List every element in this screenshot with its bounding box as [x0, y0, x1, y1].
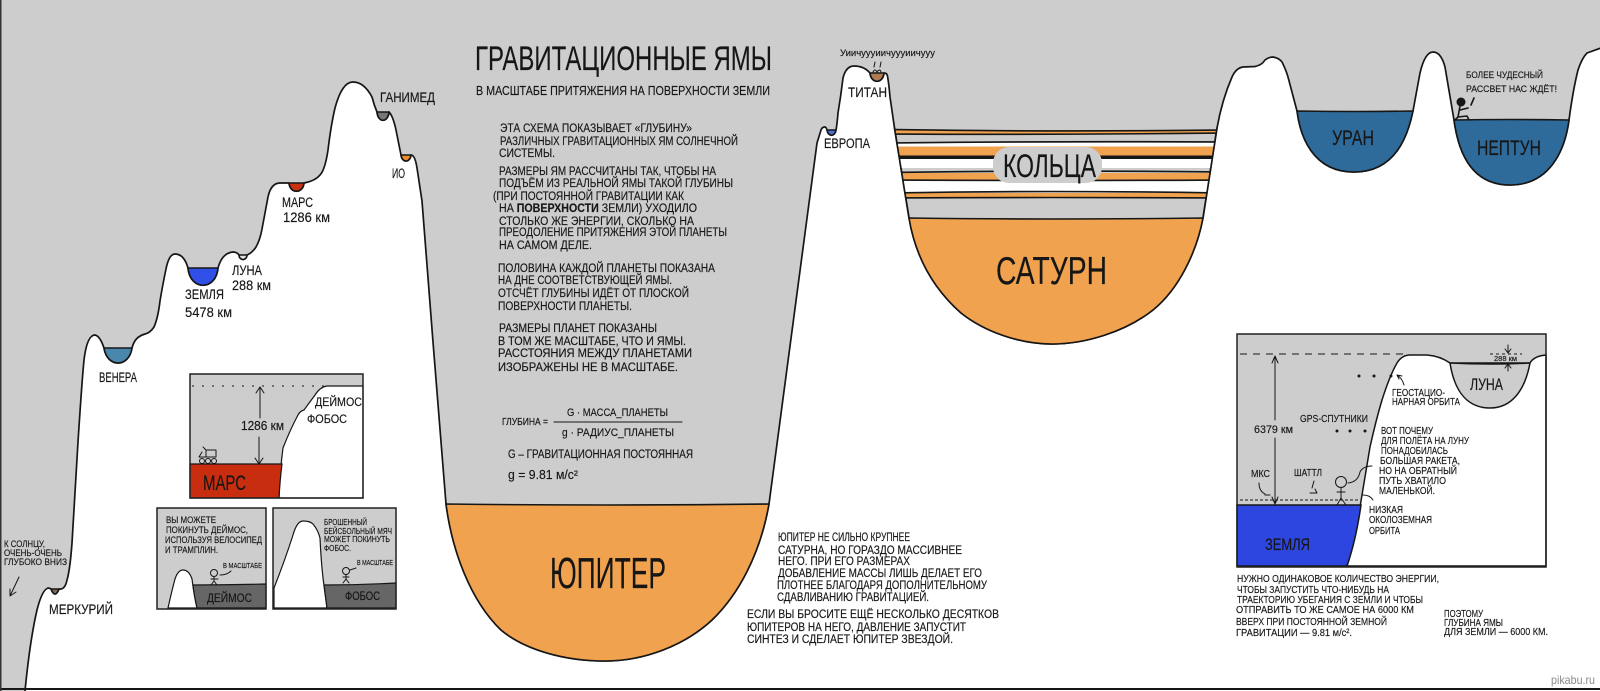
Earth depth note: ГЛУБИНА ЯМЫ — [1444, 618, 1503, 629]
label: Earth depth: ЗЕМЛЯ — [185, 287, 224, 302]
icon: Titan sled person — [873, 62, 881, 72]
planet: Neptune — [1454, 120, 1569, 185]
note: big rocket: ДЛЯ ПОЛЁТА НА ЛУНУ — [1381, 435, 1469, 447]
Earth energy note: ОТПРАВИТЬ ТО ЖЕ САМОЕ НА 6000 КМ — [1236, 604, 1414, 616]
icon: stick figure — [210, 570, 231, 585]
explanation text block: СТОЛЬКО ЖЕ ЭНЕРГИИ, СКОЛЬКО НА — [499, 216, 694, 228]
explanation text block: (ПРИ ПОСТОЯННОЙ ГРАВИТАЦИИ КАК — [493, 190, 684, 203]
label pill: Rings — [993, 147, 1102, 184]
label: low Earth orbit: НИЗКАЯ — [1369, 505, 1403, 516]
inset panel: Deimos — [157, 508, 266, 609]
label: geostationary orbit: ГЕОСТАЦИО- — [1392, 388, 1445, 399]
planet: Uranus — [1297, 111, 1413, 172]
geostationary satellites — [1358, 374, 1392, 378]
Jupiter note: ДОБАВЛЕНИЕ МАССЫ ЛИШЬ ДЕЛАЕТ ЕГО — [778, 568, 982, 580]
Neptune speech — [1466, 69, 1557, 95]
intro text block: ЭТА СХЕМА ПОКАЗЫВАЕТ «ГЛУБИНУ» — [500, 123, 692, 135]
label: Earth: ЗЕМЛЯ — [1265, 535, 1310, 554]
label: GPS: GPS-СПУТНИКИ — [1300, 413, 1368, 425]
label: Moon depth: 288 км — [232, 278, 271, 293]
label: Mars: МАРС — [203, 472, 246, 495]
arrow and shuttle icon — [1310, 481, 1317, 493]
note: to the Sun: ГЛУБОКО ВНИЗ — [4, 557, 67, 568]
Jupiter note — [777, 532, 988, 604]
depth formula: ГЛУБИНА = — [502, 417, 548, 428]
planet: Europa — [827, 130, 836, 135]
planet: Titan — [870, 73, 884, 81]
planet: Venus — [104, 348, 132, 363]
Earth depth note: ПОЭТОМУ — [1444, 609, 1483, 620]
Jupiter star note — [747, 609, 999, 646]
subtitle: В МАСШТАБЕ ПРИТЯЖЕНИЯ НА ПОВЕРХНОСТИ ЗЕМЛИ — [476, 84, 770, 98]
Moon well — [1450, 363, 1530, 408]
explanation text block: РАЗМЕРЫ ЯМ РАССЧИТАНЫ ТАК, ЧТОБЫ НА — [499, 166, 716, 178]
planet: Ganymede — [377, 112, 389, 120]
label: Phobos: ФОБОС — [307, 412, 347, 426]
arrow and ISS icon — [1259, 483, 1270, 495]
label: ISS: МКС — [1251, 469, 1270, 480]
scale text block: РАЗМЕРЫ ПЛАНЕТ ПОКАЗАНЫ — [499, 323, 657, 335]
label: Mercury: МЕРКУРИЙ — [49, 602, 113, 617]
label: Mars depth: 1286 км — [283, 210, 330, 225]
label: Titan: ТИТАН — [848, 85, 887, 100]
planet: Earth — [188, 268, 218, 285]
label: low Earth orbit — [1369, 505, 1432, 537]
Deimos text: ПОКИНУТЬ ДЕЙМОС, — [166, 524, 248, 536]
note: big rocket: ПУТЬ ХВАТИЛО — [1379, 475, 1446, 487]
note: to the Sun — [4, 539, 67, 568]
note: big rocket: ВОТ ПОЧЕМУ — [1381, 425, 1433, 437]
planet halves text block: ПОЛОВИНА КАЖДОЙ ПЛАНЕТЫ ПОКАЗАНА — [498, 262, 715, 275]
Deimos text: И ТРАМПЛИН. — [165, 545, 218, 556]
note: big rocket: ПОНАДОБИЛАСЬ — [1381, 445, 1448, 457]
GPS satellites — [1336, 430, 1366, 432]
note: big rocket: НО НА ОБРАТНЫЙ — [1379, 464, 1457, 477]
label: low Earth orbit: ОКОЛОЗЕМНАЯ — [1369, 515, 1432, 526]
Jupiter star note: ЕСЛИ ВЫ БРОСИТЕ ЕЩЁ НЕСКОЛЬКО ДЕСЯТКОВ — [747, 609, 999, 621]
Earth energy note — [1236, 573, 1439, 639]
to scale note: В МАСШТАБЕ — [223, 563, 262, 570]
label: Europa: ЕВРОПА — [824, 136, 870, 151]
icon: stick figure — [342, 568, 356, 583]
Deimos text — [165, 515, 262, 556]
label: Saturn: САТУРН — [996, 250, 1107, 293]
Saturn rings — [890, 128, 1220, 218]
planet: Saturn — [909, 218, 1203, 344]
label: Earth depth — [185, 287, 232, 320]
icon: rover — [199, 447, 216, 464]
inset panel: Phobos — [273, 508, 396, 609]
arrow: down to the Sun — [10, 577, 19, 596]
label: geostationary orbit — [1392, 388, 1460, 408]
planet: Mars — [289, 183, 304, 191]
arrow: geostationary — [1397, 375, 1404, 385]
Earth energy note: ЧТОБЫ ЗАПУСТИТЬ ЧТО-НИБУДЬ НА — [1237, 584, 1389, 596]
planet: Io — [401, 155, 411, 161]
note: big rocket — [1379, 425, 1469, 497]
planet: Jupiter — [446, 504, 769, 661]
label: Io: ИО — [392, 166, 405, 181]
to scale note: В МАСШТАБЕ — [357, 560, 393, 567]
Earth energy note: ГРАВИТАЦИИ — 9.81 м/с². — [1236, 627, 1352, 639]
intro text block — [499, 123, 738, 160]
inset panel: Mars: 1286 км — [241, 419, 284, 433]
label: shuttle: ШАТТЛ — [1294, 468, 1322, 479]
Deimos text: ИСПОЛЬЗУЯ ВЕЛОСИПЕД — [165, 535, 262, 546]
note: big rocket: БОЛЬШАЯ РАКЕТА, — [1380, 455, 1460, 467]
Phobos text: БРОШЕННЫЙ — [324, 516, 367, 527]
Jupiter note: ПЛОТНЕЕ БЛАГОДАРЯ ДОПОЛНИТЕЛЬНОМУ — [777, 580, 988, 592]
depth formula: G – ГРАВИТАЦИОННАЯ ПОСТОЯННАЯ — [508, 449, 693, 461]
depth formula: G · МАССА_ПЛАНЕТЫ — [567, 407, 668, 419]
Earth energy note: ВВЕРХ ПРИ ПОСТОЯННОЙ ЗЕМНОЙ — [1236, 615, 1387, 628]
label: Moon depth: ЛУНА — [232, 263, 262, 278]
depth formula — [502, 407, 693, 482]
planet halves text block — [498, 262, 715, 313]
explanation text block: НА САМОМ ДЕЛЕ. — [499, 240, 592, 252]
note: big rocket: МАЛЕНЬКОЙ. — [1379, 484, 1435, 497]
Jupiter note: САТУРНА, НО ГОРАЗДО МАССИВНЕЕ — [778, 545, 962, 557]
Earth depth note: ДЛЯ ЗЕМЛИ — 6000 КМ. — [1444, 627, 1548, 638]
Jupiter note: ЮПИТЕР НЕ СИЛЬНО КРУПНЕЕ — [778, 532, 910, 544]
explanation text block: ПРЕОДОЛЕНИЕ ПРИТЯЖЕНИЯ ЭТОЙ ПЛАНЕТЫ — [499, 226, 727, 239]
watermark: pikabu.ru — [1551, 673, 1595, 687]
Jupiter star note: ЮПИТЕРОВ НА НЕГО, ДАВЛЕНИЕ ЗАПУСТИТ — [747, 622, 966, 634]
planet halves text block: ОТСЧЁТ ГЛУБИНЫ ИДЁТ ОТ ПЛОСКОЙ — [498, 287, 689, 300]
inset panel: Earth escape — [1237, 334, 1546, 567]
arrow: 6379 km — [1272, 356, 1278, 504]
arrow: 1286 km — [255, 387, 264, 464]
moon depth marker: 288 км — [1494, 356, 1517, 363]
Earth energy note: НУЖНО ОДИНАКОВОЕ КОЛИЧЕСТВО ЭНЕРГИИ, — [1237, 573, 1439, 585]
stick figure with speech line — [1336, 466, 1372, 505]
label: Deimos ground: ДЕЙМОС — [207, 592, 252, 605]
label: Deimos: ДЕЙМОС — [315, 394, 362, 409]
Earth block — [1237, 505, 1361, 566]
label: Phobos ground: ФОБОС — [345, 591, 380, 603]
depth formula: g = 9.81 м/с² — [508, 467, 579, 482]
label: Mars depth — [282, 195, 330, 225]
label: geostationary orbit: НАРНАЯ ОРБИТА — [1392, 397, 1460, 408]
note: to the Sun: ОЧЕНЬ-ОЧЕНЬ — [4, 548, 62, 559]
intro text block: СИСТЕМЫ. — [499, 148, 555, 160]
planet halves text block: НА ДНЕ СООТВЕТСТВУЮЩЕЙ ЯМЫ. — [498, 274, 672, 287]
Earth depth note — [1444, 609, 1548, 638]
arrow: LEO — [1363, 495, 1373, 500]
label: Venus: ВЕНЕРА — [99, 370, 137, 385]
planet halves text block: ПОВЕРХНОСТИ ПЛАНЕТЫ. — [498, 301, 632, 313]
label: Earth depth: 5478 км — [185, 305, 232, 320]
label: Moon depth — [232, 263, 271, 293]
label: Uranus: УРАН — [1332, 127, 1374, 150]
depth formula: g · РАДИУС_ПЛАНЕТЫ — [562, 427, 674, 439]
intro text block: РАЗЛИЧНЫХ ГРАВИТАЦИОННЫХ ЯМ СОЛНЕЧНОЙ — [500, 135, 738, 148]
label pill: Rings: КОЛЬЦА — [1003, 148, 1096, 184]
Deimos text: ВЫ МОЖЕТЕ — [166, 515, 216, 526]
Earth energy note: ТРАЕКТОРИЮ УБЕГАНИЯ С ЗЕМЛИ И ЧТОБЫ — [1237, 594, 1423, 606]
scale text block — [498, 323, 692, 374]
icon: sitting figure on Neptune — [1455, 98, 1474, 120]
inset panel: Earth escape: 6379 км — [1254, 424, 1293, 436]
Neptune speech: РАССВЕТ НАС ЖДЁТ! — [1466, 84, 1557, 95]
Phobos text — [324, 516, 392, 553]
label: Jupiter: ЮПИТЕР — [550, 549, 666, 598]
planet: Mercury — [51, 589, 59, 594]
Neptune speech: БОЛЕЕ ЧУДЕСНЫЙ — [1466, 69, 1543, 81]
label: low Earth orbit: ОРБИТА — [1369, 526, 1400, 537]
Titan whee caption: Уиичуууиичуууиичууу — [840, 48, 935, 59]
inset panel: Mars — [190, 374, 363, 498]
scale text block: РАССТОЯНИЯ МЕЖДУ ПЛАНЕТАМИ — [498, 348, 692, 360]
label: Mars depth: МАРС — [282, 195, 313, 210]
title: ГРАВИТАЦИОННЫЕ ЯМЫ — [475, 40, 772, 78]
moon depth marker — [1490, 345, 1522, 371]
scale text block: В ТОМ ЖЕ МАСШТАБЕ, ЧТО И ЯМЫ. — [498, 336, 686, 348]
Mars fill — [190, 464, 282, 498]
Jupiter note: НЕГО. ПРИ ЕГО РАЗМЕРАХ — [778, 556, 910, 568]
Jupiter star note: СИНТЕЗ И СДЕЛАЕТ ЮПИТЕР ЗВЕЗДОЙ. — [747, 633, 953, 646]
explanation text block — [493, 166, 733, 252]
label: Neptune: НЕПТУН — [1477, 137, 1541, 160]
scale text block: ИЗОБРАЖЕНЫ НЕ В МАСШТАБЕ. — [498, 362, 678, 374]
explanation text block: ПОДЪЁМ ИЗ РЕАЛЬНОЙ ЯМЫ ТАКОЙ ГЛУБИНЫ — [499, 177, 733, 190]
Phobos text: БЕЙСБОЛЬНЫЙ МЯЧ — [324, 525, 392, 536]
explanation text block: НА ПОВЕРХНОСТИ ЗЕМЛИ) УХОДИЛО — [499, 203, 697, 215]
note: to the Sun: К СОЛНЦУ, — [4, 539, 45, 550]
Moon well: ЛУНА — [1470, 375, 1503, 394]
Phobos text: МОЖЕТ ПОКИНУТЬ — [324, 534, 390, 544]
planet: Moon — [239, 255, 247, 260]
Phobos text: ФОБОС. — [324, 543, 351, 553]
label: Ganymede: ГАНИМЕД — [380, 90, 435, 105]
Jupiter note: СДАВЛИВАНИЮ ГРАВИТАЦИЕЙ. — [777, 591, 929, 604]
